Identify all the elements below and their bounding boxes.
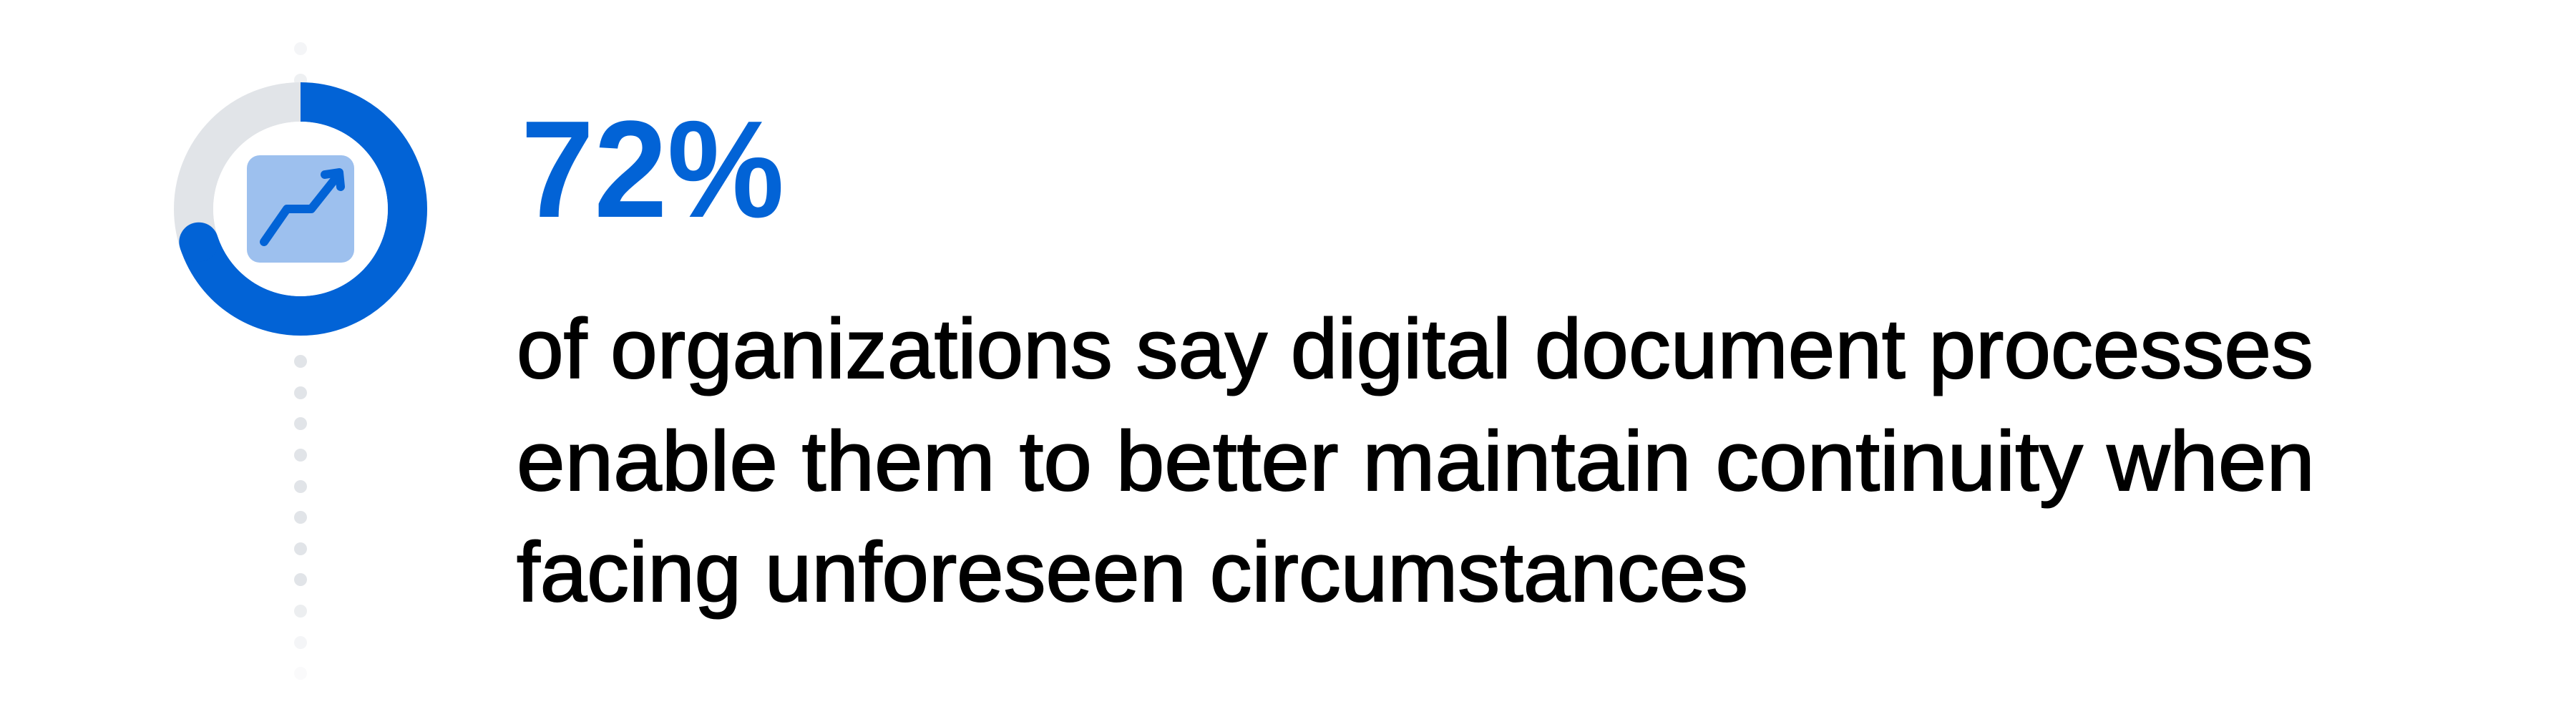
description text: of organizations say digital document processes (517, 302, 2313, 396)
description text: enable them to better maintain continuity when (517, 414, 2315, 509)
icon: growth chart (247, 155, 354, 263)
description text (517, 302, 2315, 620)
donut chart 72% (179, 102, 408, 316)
stat value: 72% (521, 92, 784, 246)
dotted timeline (294, 42, 307, 680)
description text: facing unforeseen circumstances (517, 525, 1748, 620)
